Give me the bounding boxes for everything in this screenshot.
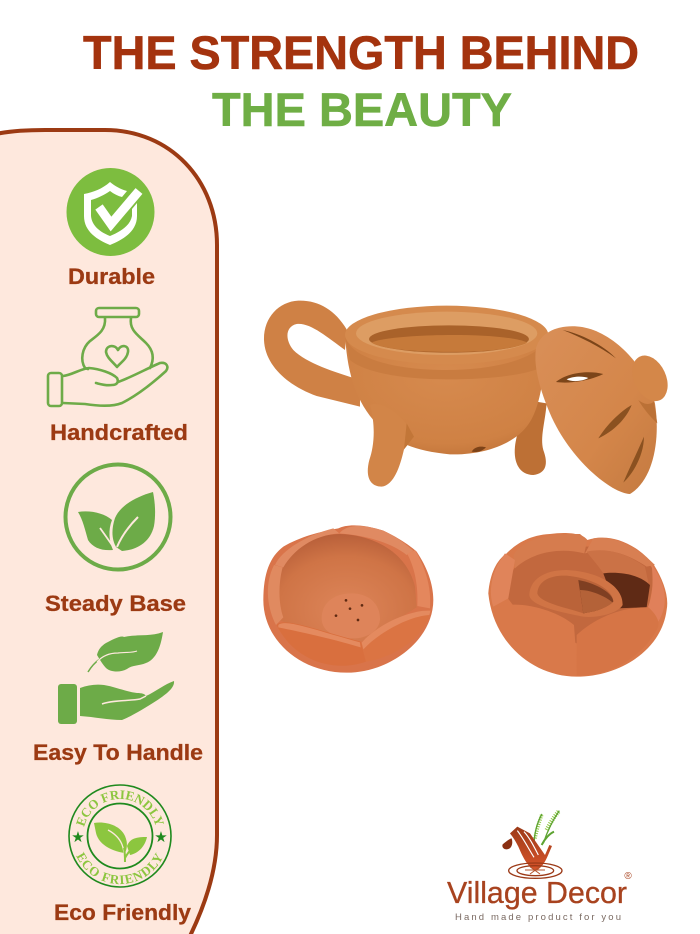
label: durable: Durable bbox=[68, 264, 155, 289]
product: bowl with perforated dome bbox=[263, 525, 433, 673]
logo registered mark: ® bbox=[624, 871, 632, 882]
title: THE STRENGTH BEHIND bbox=[83, 26, 639, 79]
icon: easy to handle hand and leaf bbox=[58, 632, 174, 724]
product: lotus bowl with inner cup bbox=[488, 533, 667, 677]
icon: durable shield bbox=[66, 168, 154, 256]
lid bbox=[535, 326, 675, 494]
inner wall bbox=[507, 546, 655, 643]
inner cavity bbox=[276, 534, 417, 642]
icon: handcrafted vase in hand bbox=[48, 308, 167, 406]
front petals bbox=[277, 622, 366, 666]
dark interior bbox=[603, 573, 650, 608]
product: terracotta pot with lid bbox=[264, 301, 675, 494]
icon: eco friendly stamp: ECO FRIENDLY bbox=[76, 852, 162, 884]
label: easy to handle: Easy To Handle bbox=[33, 740, 203, 765]
logo: village decor bbox=[447, 811, 632, 923]
logo tagline: Hand made product for you bbox=[455, 912, 621, 923]
icon: eco friendly stamp: ECO FRIENDLY bbox=[76, 790, 164, 827]
back rim petals bbox=[275, 528, 339, 567]
body bbox=[345, 333, 547, 454]
inner cup bbox=[529, 570, 623, 617]
handle bbox=[264, 301, 360, 407]
title bbox=[83, 26, 639, 136]
logo mark bbox=[502, 811, 562, 878]
label: handcrafted: Handcrafted bbox=[50, 420, 188, 445]
outer shell bbox=[488, 533, 667, 677]
panel: features sidebar bbox=[0, 128, 219, 934]
back leg bbox=[515, 400, 547, 475]
back rim petals bbox=[513, 534, 587, 568]
title: THE BEAUTY bbox=[212, 83, 512, 136]
front petals bbox=[494, 605, 577, 676]
icon: eco friendly stamp: ★ bbox=[71, 829, 85, 846]
rim bbox=[345, 306, 548, 364]
icon: eco friendly stamp bbox=[68, 784, 172, 888]
label: eco friendly: Eco Friendly bbox=[54, 900, 192, 925]
front leg bbox=[368, 404, 414, 487]
icon: eco friendly stamp: ★ bbox=[154, 829, 168, 846]
logo wordmark: Village Decor bbox=[447, 875, 627, 910]
icon: steady base leaves bbox=[66, 464, 170, 570]
outer shell bbox=[263, 525, 433, 673]
label: steady base: Steady Base bbox=[45, 591, 186, 616]
perforated dome bbox=[322, 593, 380, 638]
